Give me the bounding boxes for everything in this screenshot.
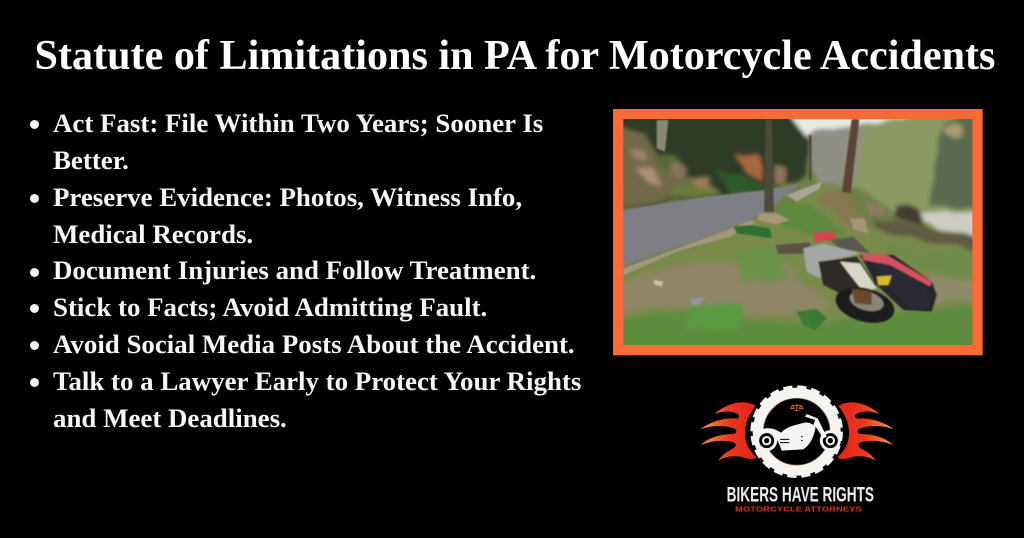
bullet list: Medical Records. [53,219,253,249]
bullet list: Preserve Evidence: Photos, Witness Info, [53,182,522,212]
photo: crashed motorcycle beside a road, in orange frame [613,109,983,356]
title: Statute of Limitations in PA for Motorcycle Accidents [35,32,995,79]
bullet list: and Meet Deadlines. [53,403,287,433]
bullet list: Document Injuries and Follow Treatment. [53,255,536,285]
bullet list: Avoid Social Media Posts About the Accident. [53,329,575,359]
motorcycle [758,414,839,451]
bullet list: Stick to Facts; Avoid Admitting Fault. [53,292,487,322]
logo tagline: MOTORCYCLE ATTORNEYS [735,505,862,514]
bullet list: Act Fast: File Within Two Years; Sooner Is [53,108,543,138]
bullet list [30,108,581,433]
bullet list: Better. [53,145,129,175]
gear [753,388,840,475]
bullet list: Talk to a Lawyer Early to Protect Your Rights [53,366,581,396]
motorcycle [776,232,937,329]
left flames [700,402,757,461]
logo: Bikers Have Rights [700,385,894,514]
right flames [837,402,894,461]
scales icon [791,404,803,410]
